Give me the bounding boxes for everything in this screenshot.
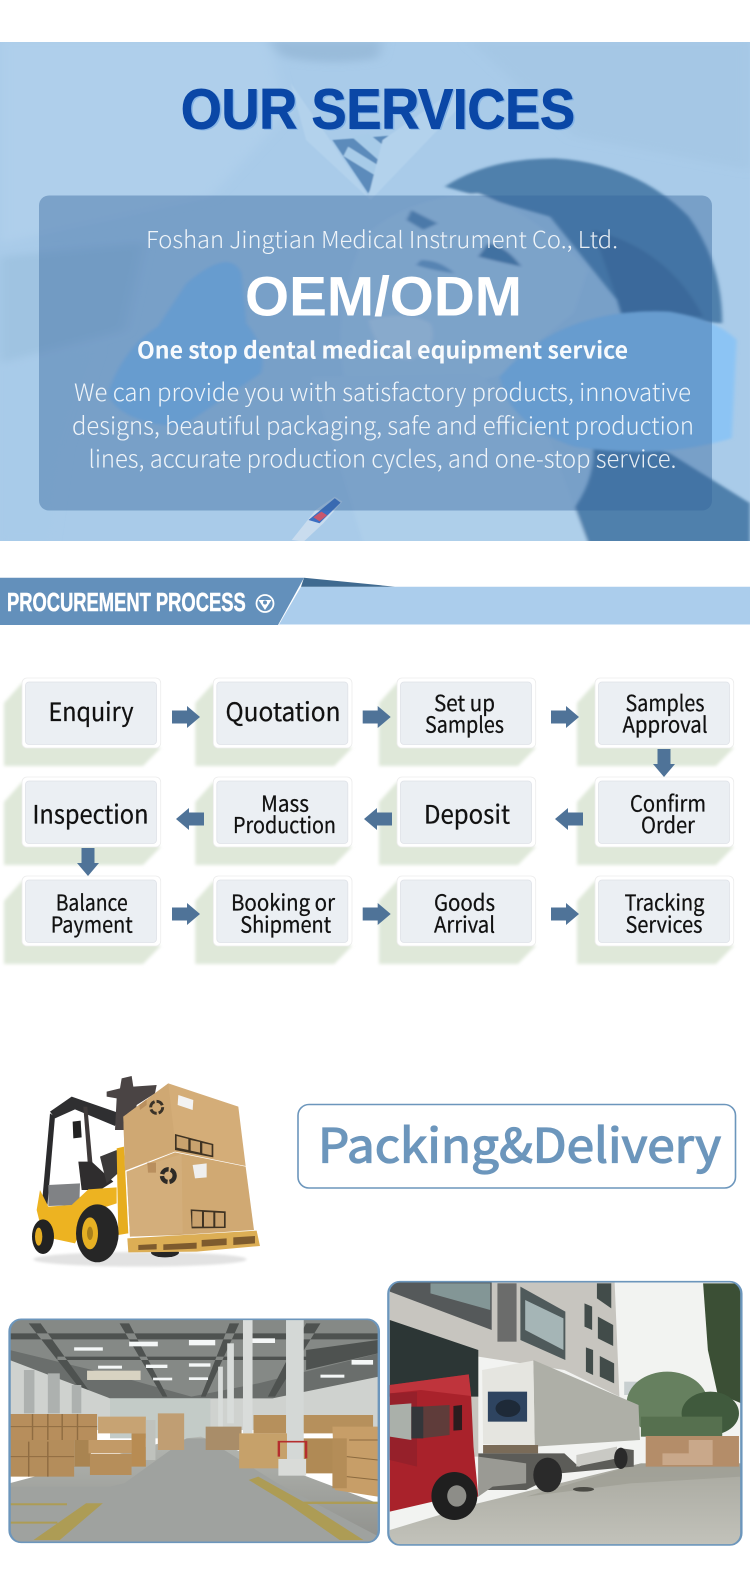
step labels: Tracking [624,885,705,917]
description text: We can provide you with satisfactory products, innovative [74,373,691,408]
woman hair [445,158,722,323]
description text [72,373,694,475]
step labels: Balance [56,885,128,917]
warehouse ceiling [10,1350,378,1398]
container [533,1360,640,1447]
wheels [32,1219,54,1254]
step labels: Shipment [240,908,331,940]
step labels: Quotation [226,692,340,729]
trees [627,1283,741,1437]
step labels: Production [233,808,336,840]
tie [332,135,388,194]
photo: truck [388,1282,741,1545]
header label: PROCUREMENT PROCESS [7,589,246,617]
carton prints [151,1101,163,1113]
warehouse wall [10,1360,379,1430]
header dark tip [301,578,395,587]
icon: circled chevron [256,595,274,612]
red rail [279,1442,306,1458]
step labels: Services [626,908,702,940]
header light band [279,587,750,624]
hero background photo [0,40,750,543]
red cab [390,1374,478,1512]
face [466,192,520,266]
illustration: forklift with boxes [32,1076,260,1267]
warehouse lights [74,1338,373,1380]
pallet [127,1231,260,1252]
step labels: Confirm [630,787,706,819]
step labels: Enquiry [48,692,134,729]
step labels: Inspection [32,795,148,832]
chart: process flow [4,678,734,964]
sky [388,1282,741,1545]
header blue tab [0,578,304,625]
step labels: Payment [51,908,133,940]
subheading: One stop dental medical equipment service [137,331,628,365]
trailer chassis [483,1445,538,1453]
yellow floor lines [10,1477,378,1540]
step labels: Deposit [424,795,510,832]
warehouse floor [10,1437,378,1542]
step labels: Order [641,808,695,840]
heading box: packing and delivery: Packing&Delivery [318,1108,721,1177]
mast [107,1076,157,1130]
engine step and wheel [478,1457,526,1497]
ground [390,1463,741,1545]
flow arrows [77,706,675,925]
heading: oem odm: OEM/ODM [245,265,522,328]
gloves [108,262,262,427]
translucent text card [39,196,712,510]
step labels: Samples [425,708,504,740]
section header: procurement process [0,578,750,625]
description text: designs, beautiful packaging, safe and efficient production [72,406,694,441]
step labels [32,686,708,940]
building [390,1282,619,1457]
stacked cartons [646,1436,739,1467]
step labels: Approval [622,708,708,740]
pillars [286,1320,304,1475]
instrument [292,497,342,542]
step labels: Goods [434,885,495,917]
forklift roof and frame [42,1113,55,1207]
right carton stacks [206,1427,242,1450]
left carton stacks [11,1414,97,1440]
step labels: Set up [434,686,495,718]
title shadow: OUR SERVICES [182,78,576,142]
description text: lines, accurate production cycles, and one-stop service. [88,440,676,475]
seat and engine [78,1162,113,1190]
title: our services: OUR SERVICES [181,77,575,141]
top carton [123,1083,246,1171]
step boxes [4,678,734,964]
photo: warehouse [10,1319,379,1542]
step labels: Mass [261,787,309,819]
company name: Foshan Jingtian Medical Instrument Co., Ltd. [146,221,618,255]
yellow body [37,1187,117,1243]
step labels: Samples [626,686,704,718]
step labels: Arrival [434,908,495,940]
panel: hero our services [0,40,750,543]
step labels: Booking or [231,885,335,917]
bottom carton [127,1152,254,1237]
